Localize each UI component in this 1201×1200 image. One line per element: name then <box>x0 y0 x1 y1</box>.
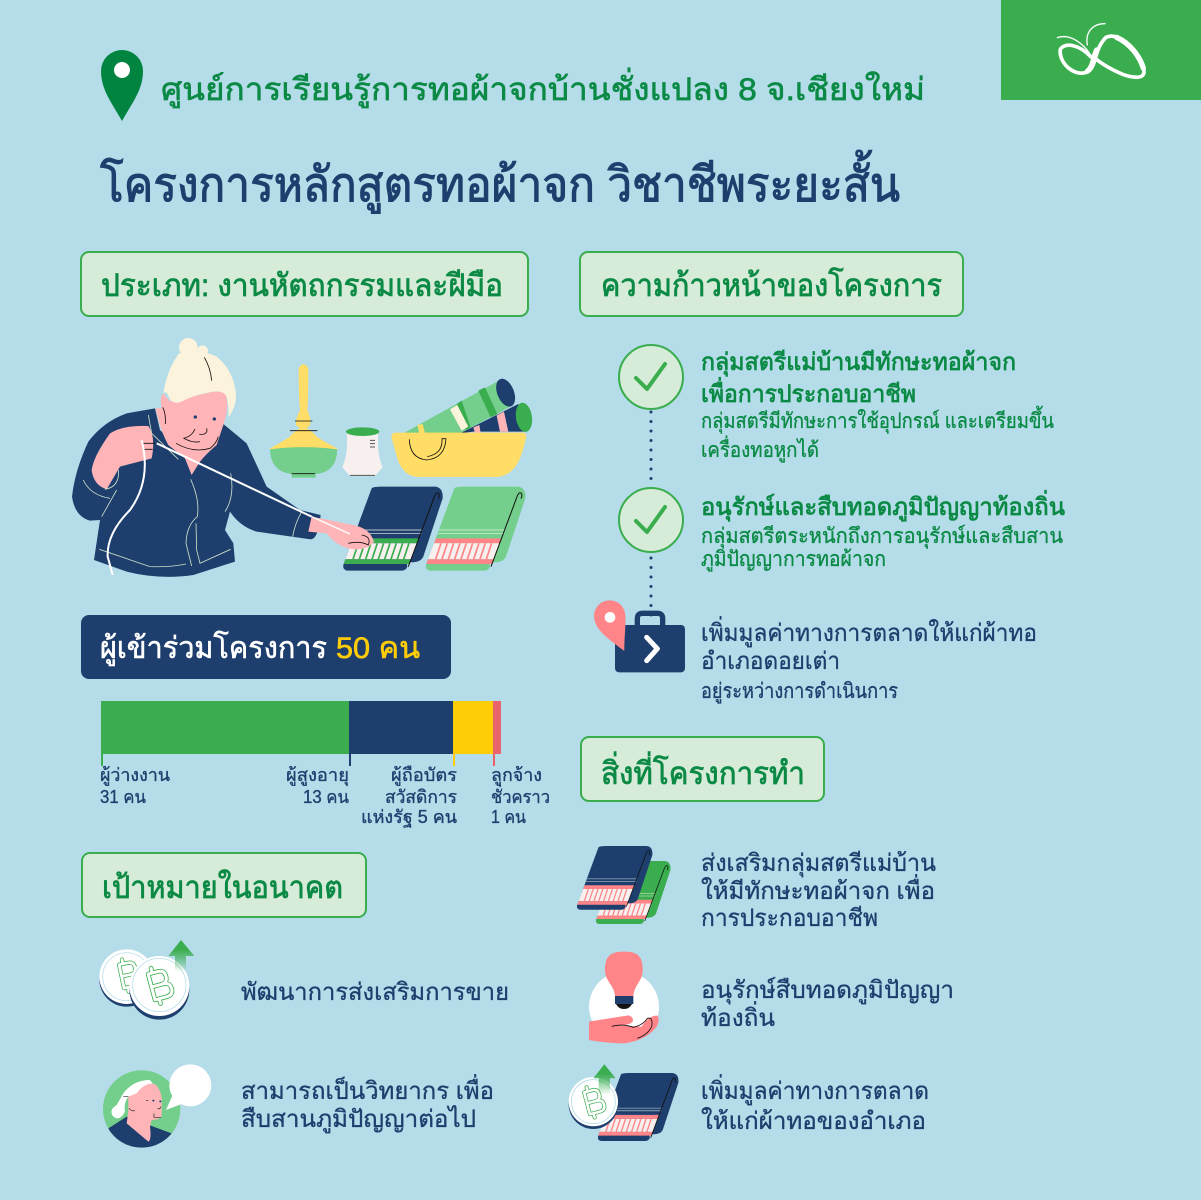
bar label: elderly <box>286 765 349 807</box>
title: โครงการหลักสูตรทอผ้าจก วิชาชีพระยะสั้น <box>100 150 900 214</box>
goal text: become speakers <box>241 1074 494 1134</box>
progress text three: อำเภอดอยเต่า <box>701 648 840 675</box>
spindle <box>269 364 338 478</box>
icon: stacked fabrics <box>577 846 671 924</box>
progress text two: ภูมิปัญญาการทอผ้าจก <box>701 548 886 572</box>
action text one: ให้มีทักษะทอผ้าจก เพื่อ <box>701 874 935 905</box>
heading: category: ประเภท: งานหัตถกรรมและฝีมือ <box>101 267 503 303</box>
progress text two <box>701 490 1065 572</box>
face and neck <box>156 392 227 475</box>
progress text one <box>701 349 1054 463</box>
icon: speaker with speech bubble <box>103 1064 211 1150</box>
icon: coins with arrow <box>99 940 194 1020</box>
heading: project progress: ความก้าวหน้าของโครงการ <box>601 267 942 303</box>
icon: briefcase with pin <box>594 600 685 672</box>
bar label: unemployed: ผู้ว่างงาน <box>100 765 170 786</box>
threads <box>157 443 312 517</box>
participants banner: 50 คน <box>336 632 420 665</box>
hair <box>163 352 236 417</box>
bar label: temporary workers: ชั่วคราว <box>491 784 550 807</box>
green fabric <box>426 487 525 571</box>
action text two <box>701 976 954 1032</box>
progress text one: เครื่องทอหูกได้ <box>701 435 819 463</box>
bar label: temporary workers <box>491 765 550 827</box>
heading: project progress <box>580 252 963 316</box>
progress text three: อยู่ระหว่างการดำเนินการ <box>701 680 898 704</box>
action text one: ส่งเสริมกลุ่มสตรีแม่บ้าน <box>701 850 936 878</box>
jacket seams <box>83 415 302 567</box>
bar label: welfare card holders: สวัสดิการ <box>385 787 457 807</box>
progress text three: เพิ่มมูลค่าทางการตลาดให้แก่ผ้าทอ <box>701 616 1037 648</box>
bar label: unemployed <box>100 765 170 807</box>
bar label: unemployed: 31 คน <box>100 787 146 807</box>
basket <box>391 424 526 477</box>
rolled fabrics <box>403 376 534 433</box>
dotted timeline <box>650 412 652 622</box>
progress text one: กลุ่มสตรีมีทักษะการใช้อุปกรณ์ และเตรียมขึ้น <box>701 406 1054 434</box>
icon: check two <box>619 488 683 552</box>
right hand <box>308 517 374 549</box>
heading: what the project does: สิ่งที่โครงการทำ <box>601 751 805 791</box>
bar label: temporary workers: ลูกจ้าง <box>491 765 542 786</box>
heading: category <box>81 252 528 316</box>
bar label: welfare card holders <box>361 765 457 828</box>
jacket <box>72 408 321 577</box>
action text two: ท้องถิ่น <box>701 1001 775 1032</box>
illustration: woman weaving with tools and fabrics <box>72 338 534 577</box>
goal text: become speakers: สืบสานภูมิปัญญาต่อไป <box>241 1105 476 1134</box>
action text one <box>701 850 936 932</box>
progress text three <box>701 616 1037 704</box>
bar label: elderly: ผู้สูงอายุ <box>286 765 349 786</box>
heading: future goals: เป้าหมายในอนาคต <box>102 869 343 905</box>
heading: future goals <box>82 853 366 917</box>
icon: location pin <box>101 50 143 121</box>
progress text one: กลุ่มสตรีแม่บ้านมีทักษะทอผ้าจก <box>701 349 1016 377</box>
stacked bar chart <box>101 701 501 766</box>
action text three <box>701 1074 929 1135</box>
action text two: อนุรักษ์สืบทอดภูมิปัญญา <box>701 976 954 1005</box>
goal text: sales promotion: พัฒนาการส่งเสริมการขาย <box>241 979 509 1006</box>
bar label: temporary workers: 1 คน <box>491 807 526 827</box>
participants banner <box>81 615 451 679</box>
action text three: เพิ่มมูลค่าทางการตลาด <box>701 1074 929 1106</box>
heading: what the project does <box>581 737 824 801</box>
icon: check one <box>619 345 683 409</box>
location heading: ศูนย์การเรียนรู้การทอผ้าจกบ้านชั่งแปลง 8 จ.เชียงใหม่ <box>161 67 925 108</box>
action text three: ให้แก่ผ้าทอของอำเภอ <box>701 1107 926 1135</box>
bar label: elderly: 13 คน <box>303 787 349 807</box>
progress text two: กลุ่มสตรีตระหนักถึงการอนุรักษ์และสืบสาน <box>701 524 1063 549</box>
bar label: welfare card holders: ผู้ถือบัตร <box>391 765 457 786</box>
logo badge <box>1001 0 1201 100</box>
action text one: การประกอบอาชีพ <box>701 905 878 932</box>
icon: light bulb in hand <box>589 952 659 1043</box>
progress text one: เพื่อการประกอบอาชีพ <box>701 377 916 408</box>
participants banner: ผู้เข้าร่วมโครงการ <box>100 630 327 666</box>
bar label: welfare card holders: แห่งรัฐ 5 คน <box>361 807 457 828</box>
cup <box>342 427 383 476</box>
icon: coin with fabric <box>569 1064 678 1141</box>
goal text: become speakers: สามารถเป็นวิทยากร เพื่อ <box>241 1074 494 1105</box>
navy fabric <box>343 487 443 571</box>
left hand <box>92 426 153 489</box>
face lines <box>143 357 218 450</box>
progress text two: อนุรักษ์และสืบทอดภูมิปัญญาท้องถิ่น <box>701 490 1065 522</box>
